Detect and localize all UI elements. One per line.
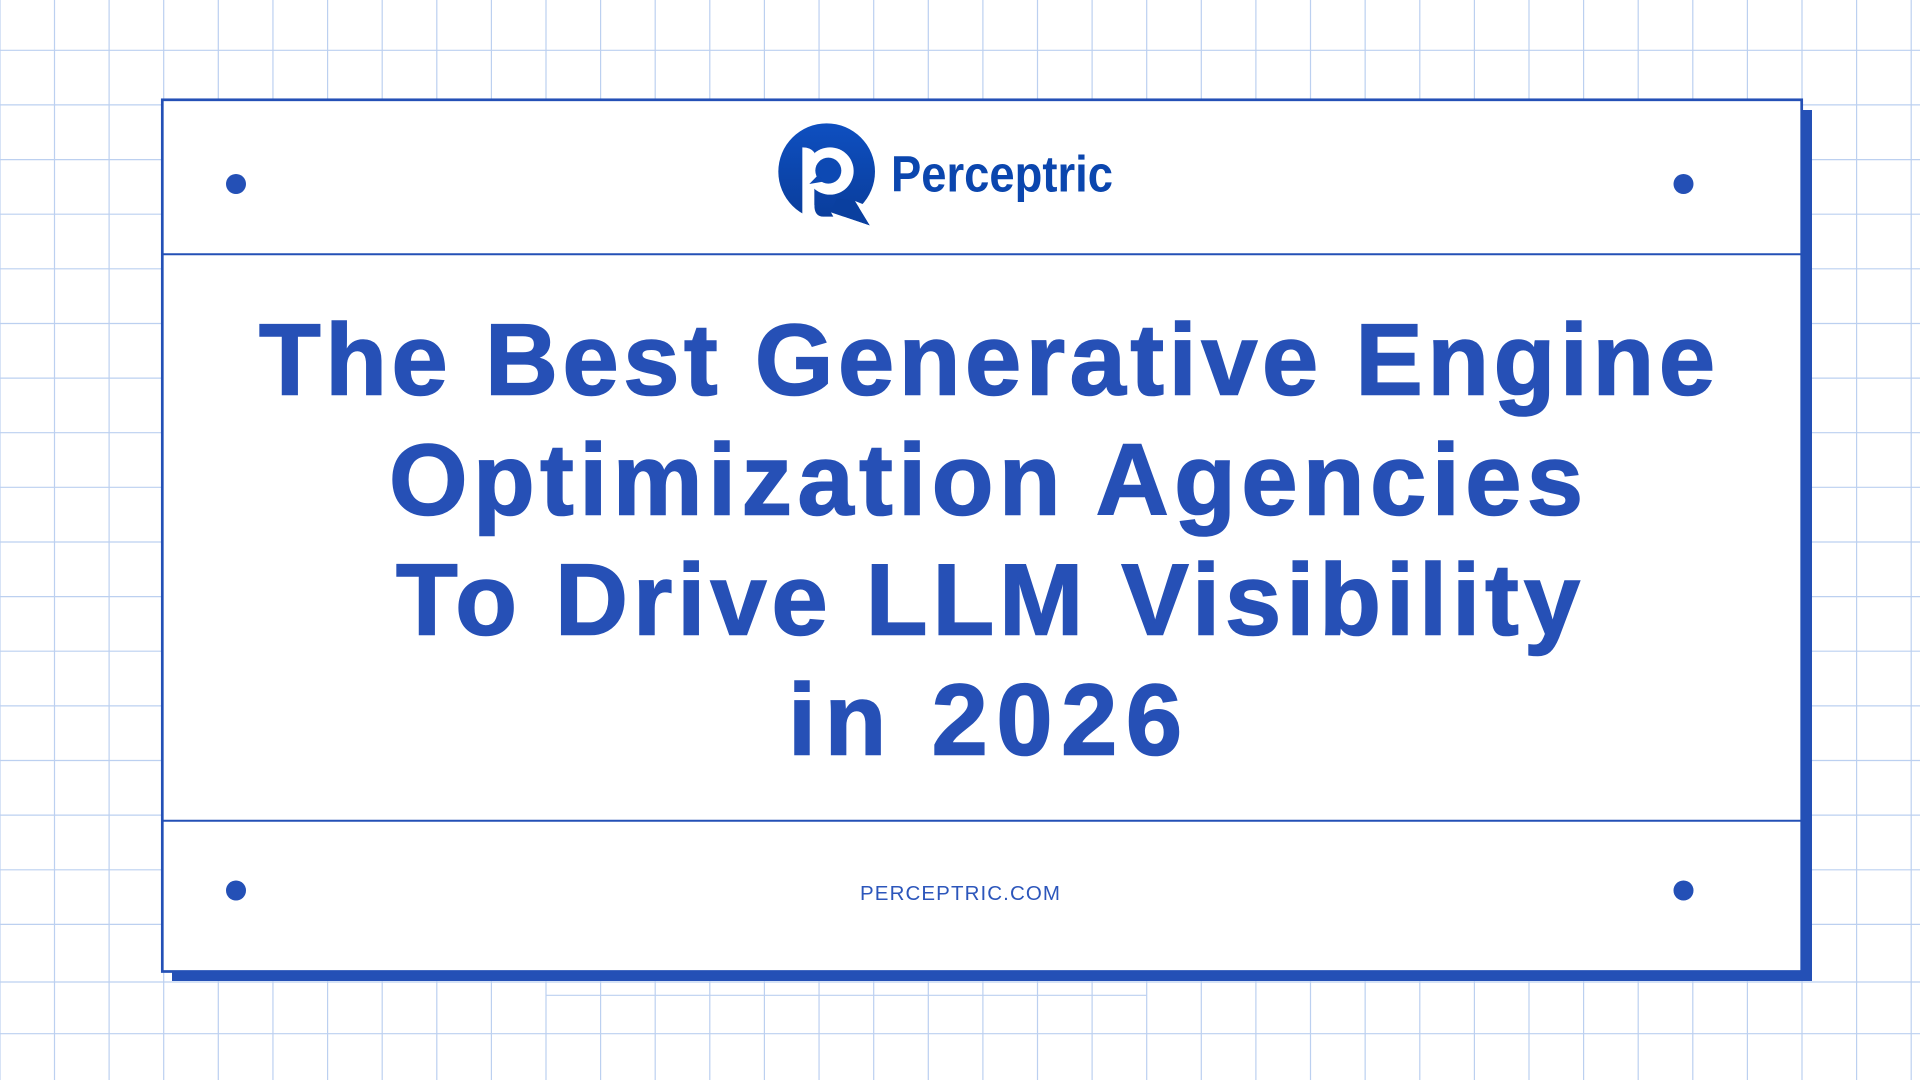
corner dot: bottom left <box>226 880 246 900</box>
corner dot: top left <box>226 174 246 194</box>
icon: Perceptric speech bubble P <box>778 123 878 232</box>
corner dot: top right <box>1674 174 1694 194</box>
title line 3: To Drive LLM Visibility <box>396 544 1580 656</box>
title <box>259 304 1715 776</box>
logo wordmark: Perceptric <box>891 146 1113 202</box>
title line 4: in 2026 <box>788 664 1182 776</box>
title line 1: The Best Generative Engine <box>259 304 1715 416</box>
corner dot: bottom right <box>1674 880 1694 900</box>
card with offset shadow <box>162 100 1812 981</box>
footer url: PERCEPTRIC.COM <box>860 882 1060 905</box>
title line 2: Optimization Agencies <box>389 424 1583 536</box>
logo <box>778 123 1113 232</box>
